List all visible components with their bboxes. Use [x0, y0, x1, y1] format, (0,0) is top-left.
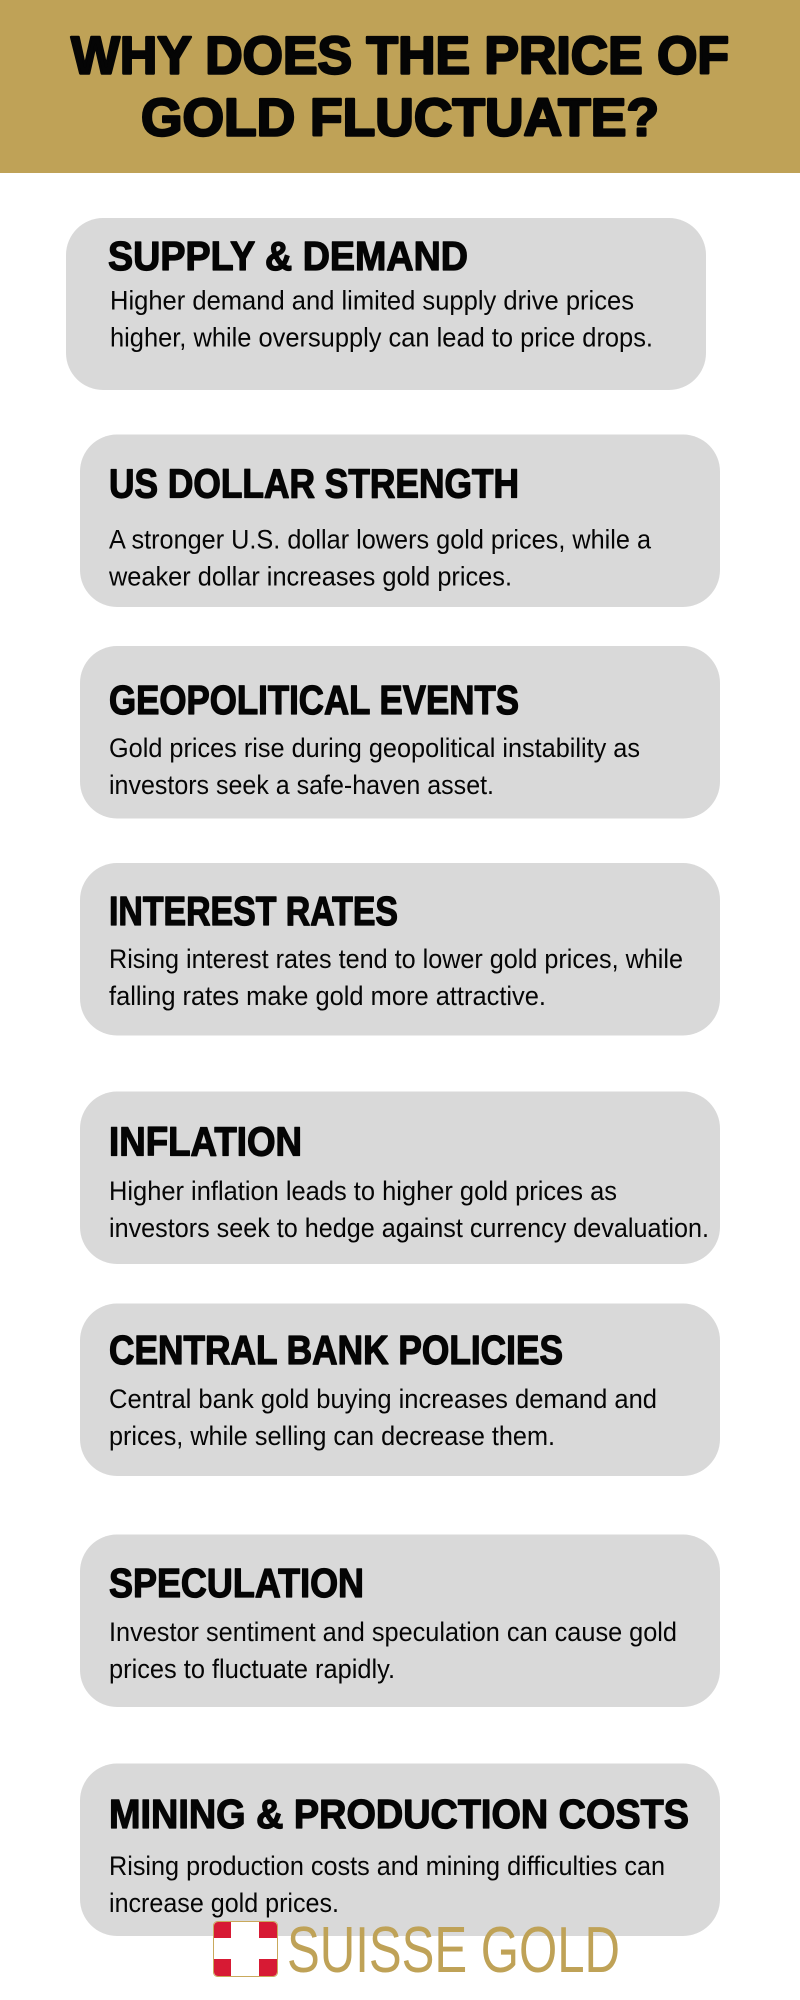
panel: supply and demand: higher, while oversupply can lead to price drops. [110, 322, 653, 352]
title: GOLD FLUCTUATE? [141, 88, 659, 148]
header banner [0, 0, 800, 173]
panel: mining and production costs [80, 1764, 720, 1936]
panel: interest rates: falling rates make gold more attractive. [109, 981, 546, 1011]
panel: inflation: INFLATION [109, 1118, 302, 1164]
panel: interest rates: INTEREST RATES [109, 888, 398, 934]
panel: central bank policies: CENTRAL BANK POLICIES [109, 1327, 563, 1373]
panel: geopolitical events: Gold prices rise during geopolitical instability as [109, 733, 640, 763]
panel: mining and production costs: increase gold prices. [109, 1888, 339, 1918]
icon: swiss cross flag [214, 1922, 278, 1976]
logo: suisse gold: SUISSE GOLD [287, 1913, 620, 1986]
panel: geopolitical events: investors seek a safe-haven asset. [109, 770, 494, 800]
panel: inflation: investors seek to hedge against currency devaluation. [109, 1213, 709, 1243]
panel: central bank policies: Central bank gold buying increases demand and [109, 1384, 657, 1414]
panel: geopolitical events [80, 646, 720, 818]
panel: mining and production costs: Rising production costs and mining difficulties can [109, 1851, 665, 1881]
logo: suisse gold [214, 1913, 620, 1986]
panel: central bank policies: prices, while selling can decrease them. [109, 1421, 555, 1451]
panel: us dollar strength: A stronger U.S. dollar lowers gold prices, while a [109, 524, 651, 554]
panel: speculation: Investor sentiment and speculation can cause gold [109, 1617, 677, 1647]
panel: speculation: prices to fluctuate rapidly. [109, 1654, 395, 1684]
panel: speculation: SPECULATION [109, 1560, 364, 1606]
panel: interest rates [80, 863, 720, 1036]
panel: interest rates: Rising interest rates tend to lower gold prices, while [109, 944, 683, 974]
panel: supply and demand: SUPPLY & DEMAND [108, 233, 468, 279]
panel: central bank policies [80, 1304, 720, 1476]
panel: speculation [80, 1534, 720, 1707]
title [71, 26, 729, 148]
panel: geopolitical events: GEOPOLITICAL EVENTS [109, 677, 519, 723]
panel: supply and demand: Higher demand and limited supply drive prices [110, 286, 634, 316]
title: WHY DOES THE PRICE OF [71, 26, 729, 86]
panel: us dollar strength: US DOLLAR STRENGTH [109, 460, 519, 506]
panel: inflation: Higher inflation leads to higher gold prices as [109, 1176, 617, 1206]
panel: inflation [80, 1092, 720, 1264]
panel: us dollar strength [80, 434, 720, 607]
panel: supply and demand [66, 218, 706, 390]
panel: mining and production costs: MINING & PRODUCTION COSTS [109, 1791, 689, 1837]
panel: us dollar strength: weaker dollar increases gold prices. [108, 562, 512, 592]
